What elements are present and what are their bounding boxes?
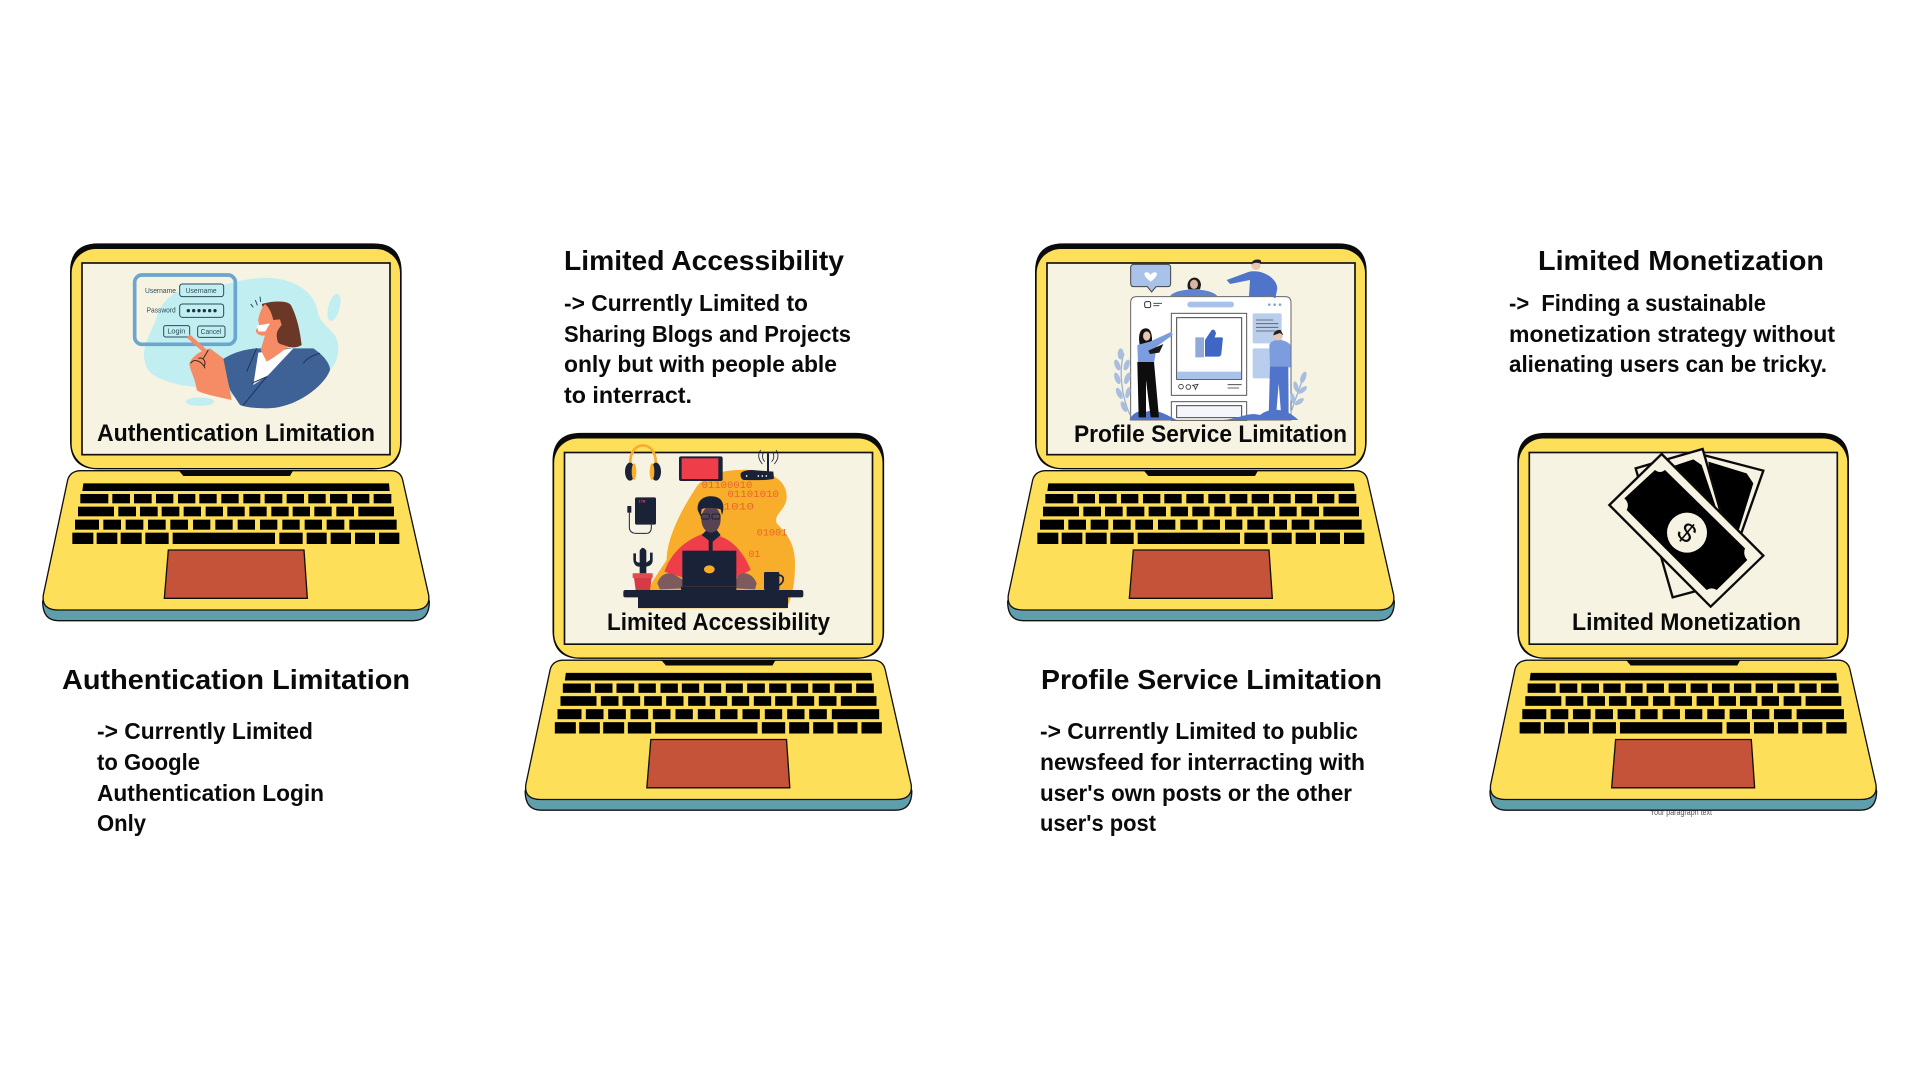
laptop: accessibility [525,433,912,810]
illustration: woman logging in: Username [186,286,217,295]
screen caption: Profile Service Limitation: Profile Service Limitation [1074,421,1347,448]
panel: limited monetization [1490,245,1877,817]
panel: profile service limitation [1008,243,1394,836]
icon: banknotes [1609,449,1763,607]
body text: profile service: user's post [1040,810,1156,836]
illustration: woman logging in: Cancel [201,327,222,336]
icon: banknotes: $ [1671,516,1703,549]
body text: monetization: monetization strategy without [1509,321,1835,347]
illustration: man working at a laptop: 1010 [723,502,754,513]
body text: accessibility: Sharing Blogs and Projects [564,321,851,347]
screen caption: Authentication Limitation: Authentication Limitation [97,420,375,447]
body text: authentication: Authentication Login [97,780,324,806]
heading: Authentication Limitation: Authentication Limitation [62,664,410,695]
body text: authentication [97,718,324,836]
laptop: profile service [1008,243,1394,621]
illustration: man working at a laptop: 01101010 [727,489,779,500]
body text: authentication: Only [97,810,146,836]
heading: Limited Monetization: Limited Monetization [1538,245,1824,276]
body text: profile service: -> Currently Limited to public [1040,718,1358,744]
illustration: man working at a laptop [623,445,803,608]
body text: profile service: newsfeed for interracting with [1040,749,1365,775]
body text: accessibility: only but with people able [564,351,837,377]
screen caption: Limited Accessibility: Limited Accessibility [607,609,831,636]
body text: profile service [1040,718,1365,836]
body text: accessibility: to interract. [564,382,692,408]
body text: authentication: -> Currently Limited [97,718,313,744]
body text: monetization: -> Finding a sustainable [1509,290,1766,316]
panel: authentication limitation [43,243,429,836]
body text: authentication: to Google [97,749,200,775]
screen caption: Limited Monetization: Limited Monetization [1572,609,1801,636]
body text: profile service: user's own posts or the other [1040,780,1352,806]
illustration: woman logging in [135,275,343,408]
body text: monetization [1509,290,1835,377]
small placeholder text: Your paragraph text [1650,807,1712,817]
illustration: man working at a laptop: 01100010 [702,480,752,491]
illustration: man working at a laptop: 01 [748,549,760,560]
illustration: woman logging in: Username [145,286,176,295]
illustration: social media post with people [1113,260,1308,420]
laptop: authentication [43,243,429,621]
illustration: man working at a laptop: 1TB [639,500,646,504]
body text: accessibility: -> Currently Limited to [564,290,808,316]
panel: limited accessibility [525,245,912,810]
body text: accessibility [564,290,851,408]
heading: Limited Accessibility: Limited Accessibility [564,245,844,276]
illustration: woman logging in: Password [147,305,176,314]
body text: monetization: alienating users can be tricky. [1509,351,1827,377]
heading: Profile Service Limitation: Profile Service Limitation [1041,664,1382,695]
laptop: monetization [1490,433,1877,810]
illustration: man working at a laptop: 01001 [757,527,787,538]
illustration: woman logging in: Login [167,327,185,336]
